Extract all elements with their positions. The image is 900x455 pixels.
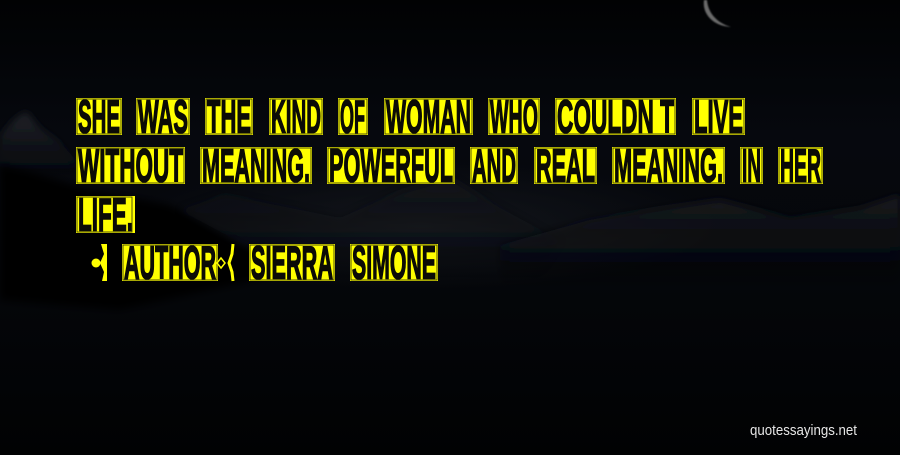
word: LIVE: [692, 90, 745, 142]
watermark: quotessayings.net: [750, 422, 858, 439]
quote line 1: WHO: [490, 90, 538, 142]
word: AUTHOR: [122, 236, 218, 288]
icon: colon ornament: [217, 244, 233, 281]
word: THE: [205, 90, 253, 142]
quote line 2: MEANING.: [202, 140, 310, 192]
icon: crescent moon: [704, 0, 731, 27]
author line: SIERRA: [251, 236, 333, 288]
icon: bullet: [92, 244, 107, 281]
quote line 1: [76, 90, 745, 142]
quote line 3: [76, 188, 135, 240]
quote line 1: KIND: [271, 90, 321, 142]
word: IN: [740, 140, 763, 192]
author line: [92, 236, 438, 288]
word: WHO: [488, 90, 540, 142]
word: POWERFUL: [327, 140, 455, 192]
quote poster: HER: [780, 140, 821, 192]
word: MEANING,: [200, 140, 312, 192]
author line: AUTHOR: [124, 236, 216, 288]
quote line 2: AND: [472, 140, 516, 192]
word: KIND: [269, 90, 323, 142]
word: WITHOUT: [76, 140, 185, 192]
word: HER: [778, 140, 823, 192]
quote poster: SIMONE: [352, 236, 436, 288]
background: mountains: [0, 112, 900, 310]
quote line 1: SHE: [78, 90, 120, 142]
word: MEANING, second: [612, 140, 725, 192]
word: SHE: [76, 90, 122, 142]
quote line 2: IN: [742, 140, 761, 192]
word: WOMAN: [384, 90, 473, 142]
word: SIERRA: [249, 236, 335, 288]
quote line 1: WAS: [138, 90, 188, 142]
quote line 1: WOMAN: [386, 90, 471, 142]
word: SIMONE: [350, 236, 438, 288]
word: COULDN'T: COULDN T: [557, 90, 674, 142]
quote line 2: MEANING.: [614, 140, 723, 192]
word: LIFE.: LIFE.: [78, 188, 133, 240]
quote line 1: OF: [340, 90, 365, 142]
quote line 2: POWERFUL: [329, 140, 453, 192]
word: REAL: [534, 140, 597, 192]
word: THE: THE: [207, 90, 251, 142]
quote line 2: WITHOUT: [78, 140, 183, 192]
word: COULDN'T: [555, 90, 676, 142]
quote line 2: REAL: [536, 140, 595, 192]
quote poster: LIVE: [694, 90, 743, 142]
word: AND: [470, 140, 518, 192]
word: OF: [338, 90, 368, 142]
quote line 2: [76, 140, 823, 192]
word: WAS: [136, 90, 190, 142]
